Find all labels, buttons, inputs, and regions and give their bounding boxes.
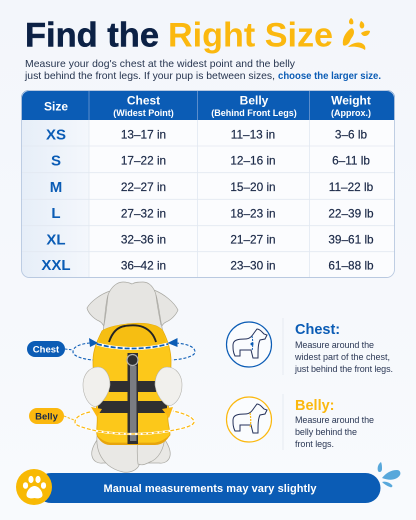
chest column: 32–36 in [121, 232, 166, 246]
belly column: 18–23 in [230, 206, 276, 220]
weight column [328, 128, 374, 272]
dog illustration wearing life vest [83, 282, 182, 472]
table header: (Behind Front Legs) [211, 108, 297, 118]
footer banner [36, 473, 380, 503]
chest description: just behind the front legs. [294, 364, 393, 374]
chest description [294, 322, 393, 374]
table header: Belly [240, 94, 269, 108]
chest column [121, 128, 166, 272]
size column: XL [46, 232, 66, 248]
intro text [24, 59, 381, 82]
belly column: 21–27 in [230, 232, 276, 246]
title: Right Size [168, 16, 333, 54]
chest column: 36–42 in [121, 258, 166, 272]
belly measurement arrows [64, 407, 194, 434]
divider: belly [282, 394, 284, 450]
belly description: front legs. [295, 439, 334, 449]
weight column: 22–39 lb [328, 206, 374, 220]
belly description: Belly: [295, 398, 334, 414]
life vest [93, 323, 171, 445]
chest column: 27–32 in [121, 206, 166, 220]
table header: Weight [331, 94, 371, 108]
chest description: Measure around the [295, 340, 374, 350]
dog head and ears [87, 282, 178, 332]
chest description: widest part of the chest, [294, 352, 390, 362]
belly label pill: Belly [35, 412, 59, 422]
chest label pill [27, 341, 65, 357]
table header [44, 94, 371, 118]
dog hind legs [92, 436, 170, 472]
chest label pill: Chest [33, 344, 60, 356]
table header: Size [44, 100, 68, 114]
belly label pill [29, 408, 64, 424]
belly column: 11–13 in [231, 128, 275, 142]
table header: (Approx.) [331, 108, 371, 118]
chest icon [226, 322, 272, 367]
icon: yellow splash [343, 18, 370, 50]
table header: (Widest Point) [113, 108, 174, 118]
belly column [230, 128, 276, 272]
size column: XXL [41, 257, 71, 274]
icon: blue splash [378, 462, 400, 487]
icon: paw badge [16, 469, 52, 505]
front legs [83, 367, 182, 406]
weight column: 3–6 lb [335, 128, 368, 142]
weight column: 39–61 lb [328, 232, 374, 246]
size column: S [51, 152, 61, 170]
intro text: just behind the front legs. If your pup is between sizes, [24, 71, 275, 82]
chest description: Chest: [295, 322, 340, 338]
size column: L [51, 205, 61, 222]
size column: M [50, 179, 62, 196]
belly description [295, 398, 374, 449]
title: Find the [25, 16, 159, 54]
weight column: 6–11 lb [332, 154, 370, 168]
size column: XS [46, 126, 66, 144]
intro text: choose the larger size. [278, 71, 381, 82]
belly icon [226, 397, 272, 442]
chest column: 22–27 in [121, 180, 166, 194]
weight column: 61–88 lb [328, 258, 374, 272]
weight column: 11–22 lb [329, 180, 374, 194]
belly description: belly behind the [295, 427, 357, 437]
belly description: Measure around the [295, 415, 374, 425]
belly column: 23–30 in [230, 258, 276, 272]
title [25, 16, 333, 54]
chest measurement arrows [65, 338, 195, 360]
size table [21, 90, 395, 278]
size column [41, 126, 71, 274]
table header: Chest [127, 94, 160, 108]
intro text: Measure your dog's chest at the widest point and the belly [25, 59, 296, 70]
chest column: 13–17 in [121, 128, 166, 142]
divider: chest [282, 318, 284, 375]
chest column: 17–22 in [121, 154, 166, 168]
belly column: 12–16 in [230, 154, 276, 168]
footer banner: Manual measurements may vary slightly [104, 483, 317, 495]
belly column: 15–20 in [230, 180, 276, 194]
